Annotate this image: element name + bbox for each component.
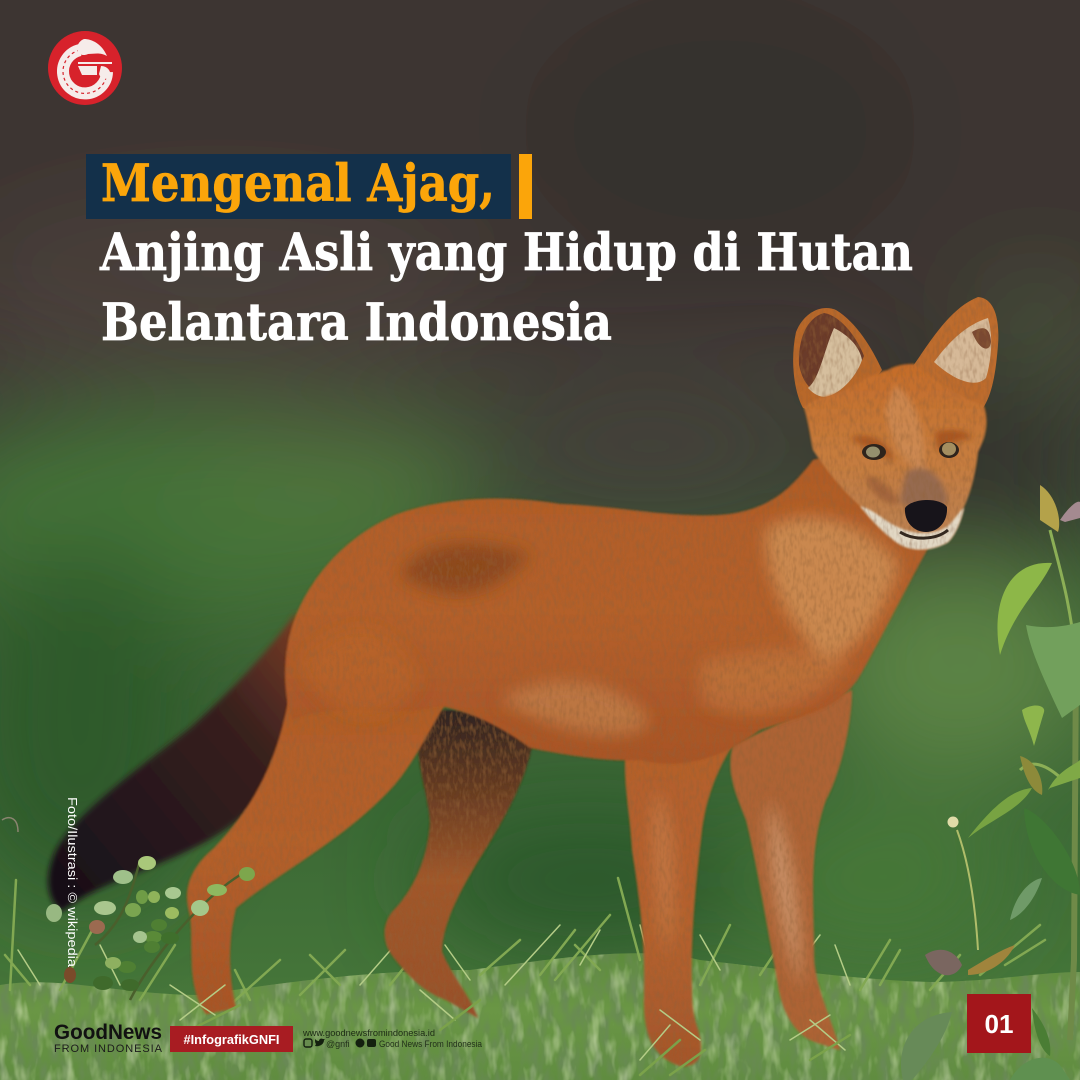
grass blades over paws [170, 985, 850, 1075]
page number [967, 994, 1031, 1053]
footer branding: #InfografikGNFI [184, 1033, 280, 1047]
muzzle [860, 506, 964, 550]
hashtag tag [170, 1026, 293, 1052]
website: www.goodnewsfromindonesia.id [302, 1028, 435, 1038]
grass ground [0, 878, 1080, 1080]
page number: 01 [984, 1009, 1014, 1039]
near front leg [625, 730, 736, 1066]
dog [187, 297, 998, 1066]
title block [86, 154, 913, 353]
footer branding [54, 1021, 482, 1055]
near hind leg [187, 669, 445, 1014]
left ear [793, 308, 882, 420]
right ear [913, 297, 998, 408]
body shading [300, 517, 900, 990]
accent bar [519, 154, 532, 219]
head [804, 364, 986, 550]
footer branding: FROM INDONESIA [54, 1043, 163, 1055]
plant: low shrub at left [2, 818, 255, 1000]
dog face details [862, 442, 959, 538]
far front leg [730, 690, 852, 1050]
heading line 1: Mengenal Ajag, [101, 154, 495, 214]
logo [48, 31, 122, 105]
serpent ring emblem [63, 39, 112, 93]
dog tail [48, 612, 296, 912]
social icons [304, 1038, 376, 1048]
eyes [862, 442, 959, 460]
footer branding: @gnfi [326, 1039, 350, 1049]
far hind leg [385, 710, 532, 1018]
heading line 2: Anjing Asli yang Hidup di Hutan [99, 223, 913, 283]
highlight box [86, 154, 511, 219]
plant: tall stem at right [901, 485, 1080, 1080]
GoodNews wordmark: GoodNews [54, 1021, 162, 1044]
footer branding: Good News From Indonesia [379, 1039, 482, 1049]
heading line 3: Belantara Indonesia [101, 293, 612, 353]
photo credit: Foto/Ilustrasi : © wikipedia [65, 797, 80, 968]
nose and mouth [900, 500, 948, 538]
body [285, 457, 930, 764]
